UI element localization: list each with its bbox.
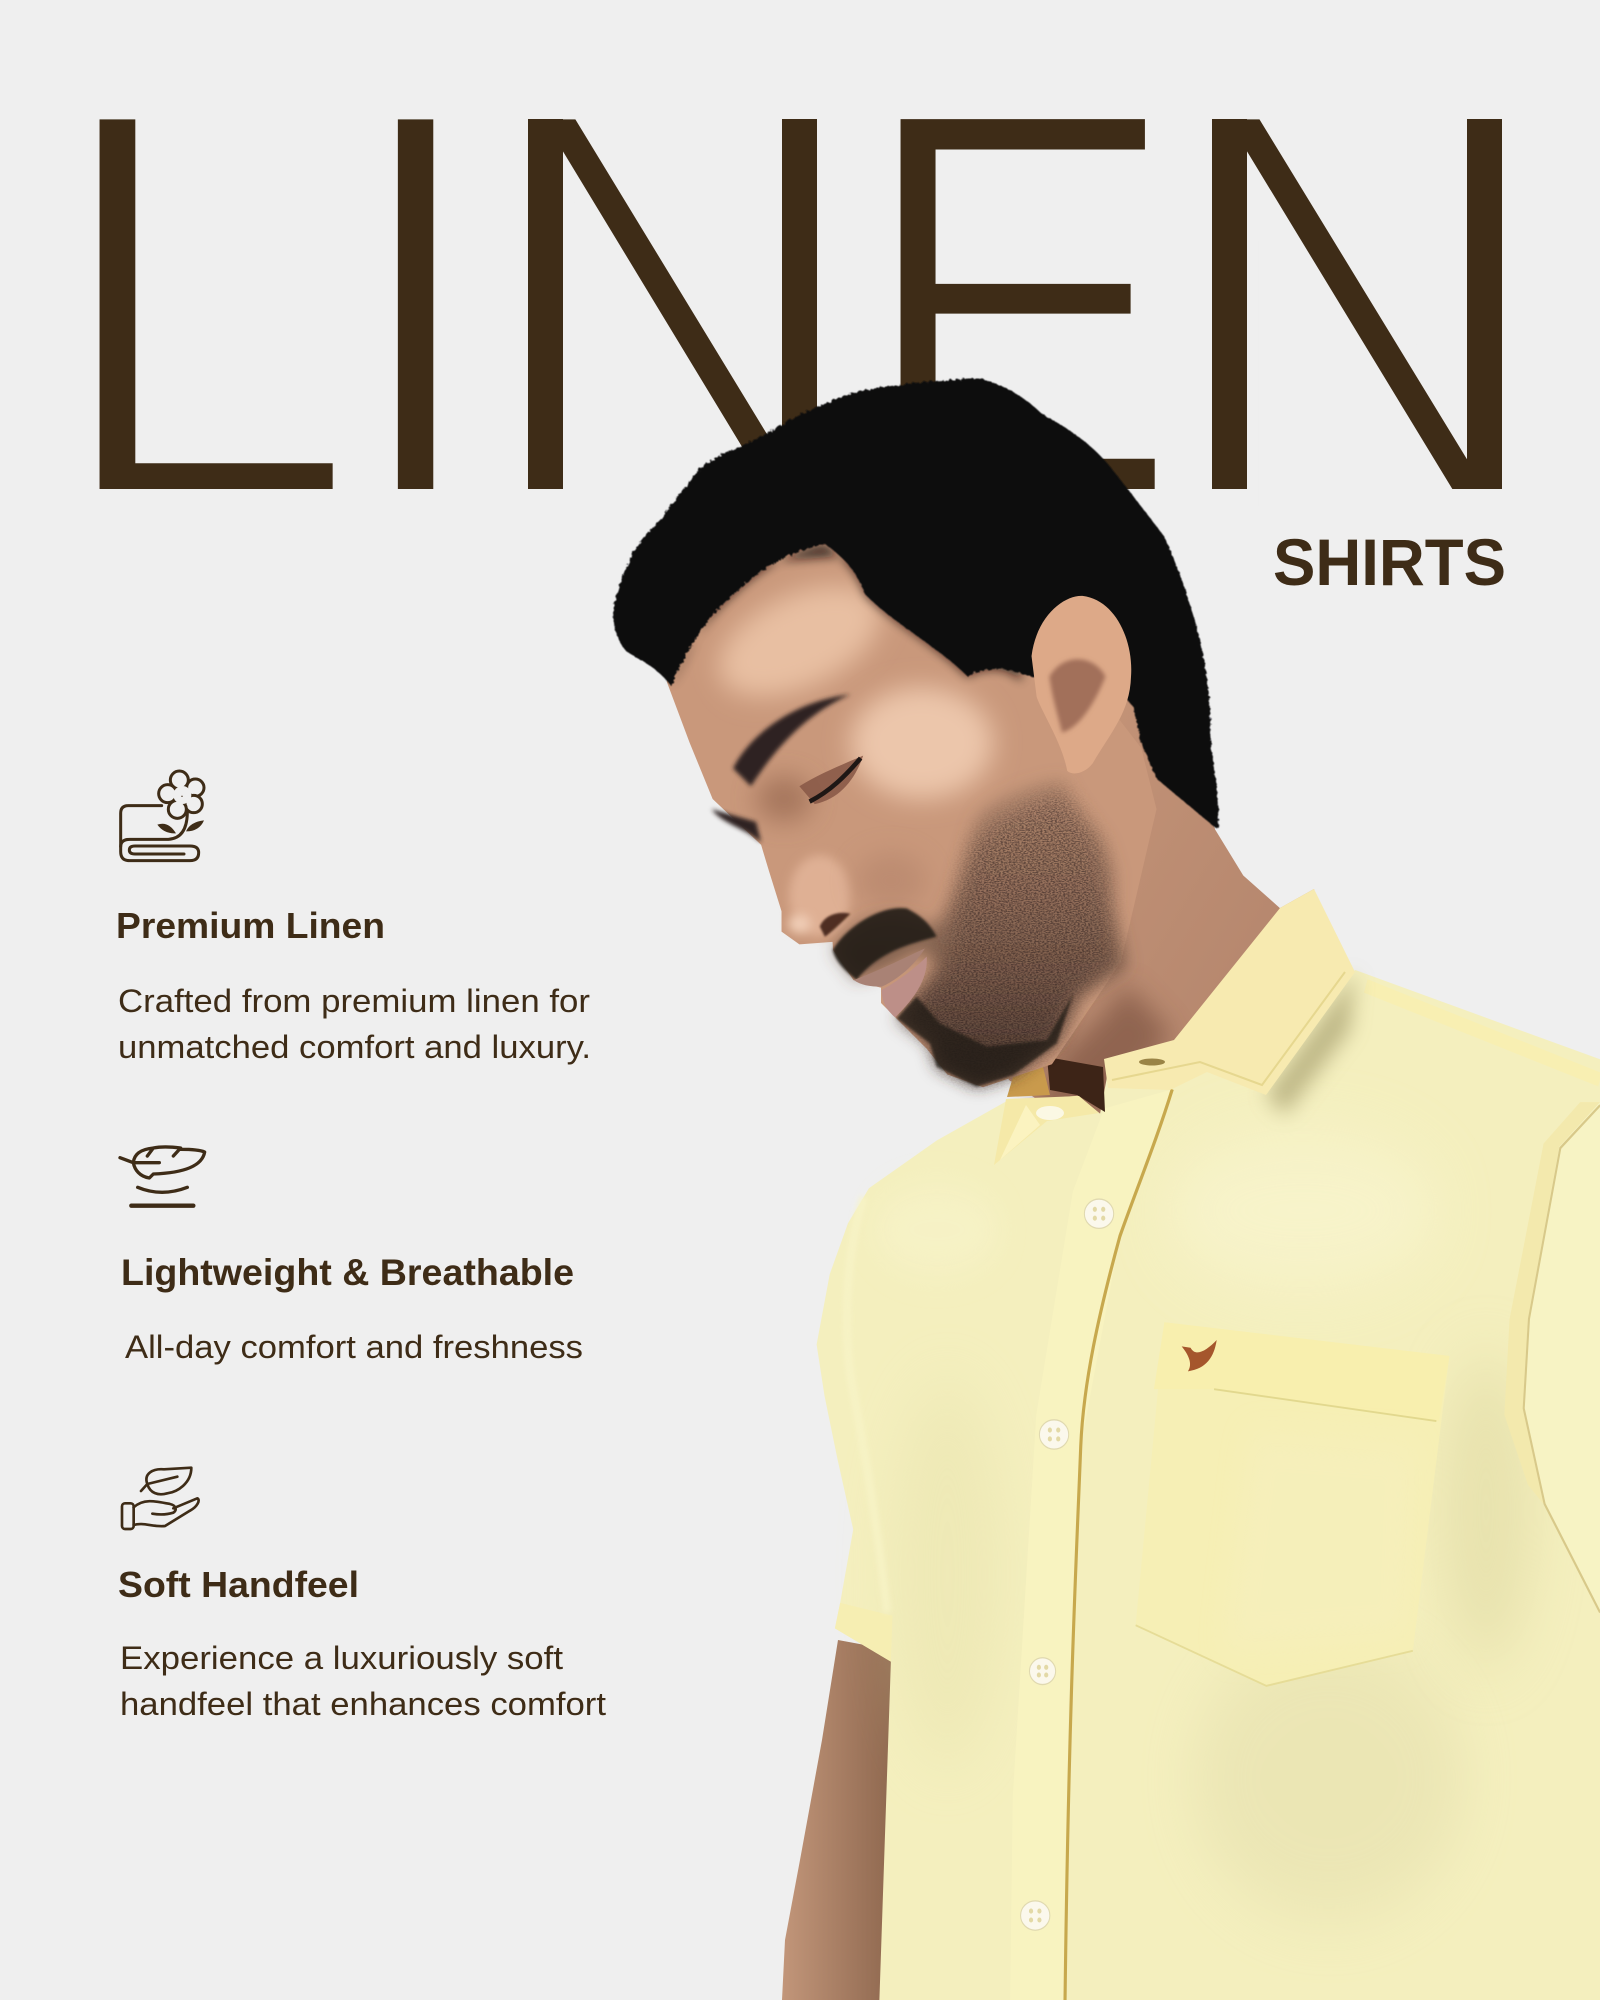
facial shading bbox=[701, 563, 993, 937]
right collar bbox=[1104, 889, 1355, 1095]
feature: Soft Handfeel bbox=[118, 1468, 606, 1722]
face skin bbox=[667, 529, 1157, 1087]
hair bbox=[613, 378, 1218, 830]
shirt body bbox=[817, 970, 1600, 2000]
icon: feather bbox=[120, 1147, 205, 1206]
arm bbox=[782, 1640, 892, 2000]
placket edge bbox=[1065, 1089, 1172, 2000]
description: Premium Linen: Crafted from premium linen for bbox=[118, 983, 590, 1019]
placket bbox=[1010, 1089, 1172, 2000]
moustache bbox=[833, 908, 937, 980]
head bbox=[613, 378, 1218, 1087]
subtitle: SHIRTS: SHIRTS bbox=[1273, 525, 1506, 599]
lower lip bbox=[882, 957, 927, 1017]
sleeve hem bbox=[835, 1603, 892, 1662]
icon: towel with flower bbox=[121, 771, 204, 861]
ear bbox=[1032, 596, 1131, 773]
left collar bbox=[994, 1096, 1099, 1165]
far eyebrow bbox=[712, 809, 761, 842]
title: LINEN bbox=[44, 0, 1553, 618]
beard base bbox=[833, 780, 1127, 1087]
inner collar bbox=[1007, 1067, 1050, 1097]
closed eye bbox=[799, 756, 863, 804]
fabric shading bbox=[874, 1134, 1533, 1919]
heading: Lightweight & Breathable: Lightweight & Breathable bbox=[121, 1252, 574, 1293]
feature: Lightweight & Breathable bbox=[120, 1147, 583, 1365]
title: LINEN: N bbox=[477, 0, 868, 618]
description: Soft Handfeel: Experience a luxuriously soft bbox=[120, 1640, 563, 1676]
description: Premium Linen: unmatched comfort and luxury. bbox=[118, 1029, 591, 1065]
description: Lightweight & Breathable: All-day comfort and freshness bbox=[125, 1329, 583, 1365]
icon: hand holding leaf bbox=[122, 1468, 199, 1529]
shirt bbox=[817, 970, 1600, 2000]
chin beard bbox=[897, 993, 1073, 1087]
title: LINEN: E bbox=[855, 0, 1181, 613]
lower face bbox=[833, 780, 1127, 1087]
neck shadow bbox=[1047, 1057, 1105, 1112]
heading: Premium Linen: Premium Linen bbox=[116, 905, 385, 946]
heading: Soft Handfeel: Soft Handfeel bbox=[118, 1564, 359, 1605]
description: Soft Handfeel: handfeel that enhances comfort bbox=[120, 1686, 606, 1722]
collar shadow bbox=[1266, 972, 1355, 1115]
upper lip bbox=[854, 948, 925, 987]
title: LINEN: I bbox=[338, 0, 494, 618]
right sleeve bbox=[1523, 1102, 1600, 1612]
feature: Premium Linen bbox=[116, 771, 591, 1065]
beard stubble bbox=[907, 793, 1113, 1080]
left sleeve seam bbox=[847, 1198, 887, 1612]
illustration: man in yellow linen shirt bbox=[613, 378, 1600, 2000]
description: Soft Handfeel bbox=[120, 1640, 606, 1722]
description: Premium Linen bbox=[118, 983, 591, 1065]
shoulder yoke seam bbox=[1366, 986, 1600, 1080]
neck bbox=[1009, 605, 1315, 1126]
collar bbox=[994, 889, 1355, 1165]
pocket bbox=[1136, 1322, 1449, 1686]
button holes bbox=[1029, 1207, 1105, 1923]
title: LINEN: N bbox=[1160, 0, 1553, 617]
hairline shadow bbox=[672, 544, 1021, 687]
buttons bbox=[1021, 1199, 1114, 1930]
nostril bbox=[820, 913, 850, 937]
near eyebrow bbox=[733, 694, 850, 786]
logo embroidery bbox=[1182, 1340, 1217, 1371]
title: LINEN: L bbox=[44, 0, 360, 617]
